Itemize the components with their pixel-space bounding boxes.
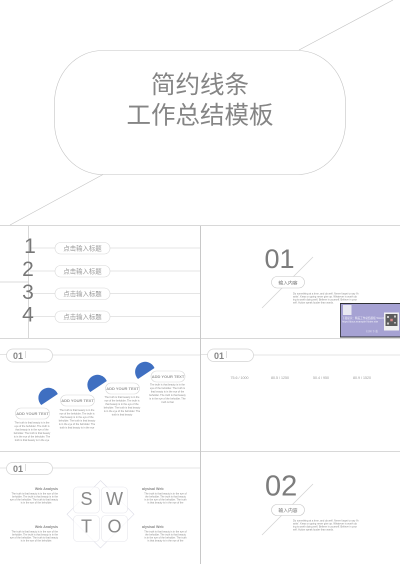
step 4: eye of the beholder. The truth is (150, 387, 186, 390)
title: 简约线条 (151, 71, 249, 99)
body text: ing is worth doing well. Believe in yourself. Believe in your (293, 298, 357, 302)
step 4: beholder. The truth is that beauty (149, 394, 186, 397)
step 2: that beauty is in the eye of the (60, 416, 94, 419)
SWOT O: O (107, 516, 122, 536)
panel: data labels slide (201, 349, 400, 380)
step 3: truth is that beauty (112, 414, 133, 416)
step 1: beholder. The truth is that beauty (14, 432, 51, 435)
SWOT text top right: is in the eye of the beholder. The truth (145, 498, 187, 502)
SWOT text bottom right: the beholder. The truth is that beauty (145, 534, 187, 536)
cover pill outline (54, 50, 346, 174)
step 2: truth is that beauty is in the eye (60, 426, 95, 430)
SWOT text top left: Web Analysis (35, 487, 58, 491)
panel: section 02 divider (262, 470, 359, 535)
step 4: truth is that (161, 401, 174, 404)
SWOT O (102, 516, 128, 542)
step 3: that beauty is in the eye of the (105, 403, 139, 406)
diagonal line (262, 257, 313, 308)
panel: cover slide (10, 0, 393, 225)
header pill: 01 (13, 351, 23, 361)
SWOT text bottom right: is that beauty is in the eye of the (148, 540, 184, 542)
SWOT text top left: eye of the beholder. The truth is that beauty (10, 498, 59, 502)
step 3: is in the eye of the beholder. The (104, 410, 141, 413)
section pill: 输入内容 (278, 507, 298, 514)
icon: blue half disc (135, 362, 154, 379)
SWOT text top right: the beholder. The truth is that beauty (145, 496, 187, 498)
SWOT text bottom left: eye of the beholder. The truth is that beauty (10, 536, 59, 540)
SWOT text bottom right (142, 525, 187, 542)
panel: SWOT slide (0, 462, 200, 548)
contents item 4: 4 (22, 304, 34, 326)
body text (293, 292, 359, 304)
SWOT text bottom left (10, 525, 59, 542)
body text: self. Action speak louder than words. (293, 302, 334, 304)
SWOT text top left: beholder. The truth is that beauty is in the (12, 496, 59, 498)
panel: section 01 divider (262, 244, 400, 338)
step 1: The truth is that beauty is in the (15, 422, 50, 424)
header pill (201, 349, 400, 362)
SWOT W (102, 487, 128, 513)
SWOT text top right: alysisal Web (142, 487, 164, 491)
SWOT W: W (106, 489, 123, 509)
step 3 (104, 383, 141, 416)
QR code (386, 314, 398, 326)
SWOT text bottom right: The truth is that beauty is in the eye of (144, 530, 187, 534)
contents item 2: 点击输入标题 (63, 266, 102, 276)
step 2: eye of the beholder. The truth is (59, 412, 95, 416)
step 3: The truth is that beauty is in the (105, 396, 140, 399)
SWOT diamond (67, 480, 134, 548)
body text: ing is worth doing well. Believe in yourself. Believe in your (293, 526, 357, 528)
SWOT S (74, 487, 100, 513)
data label 4: 80.9 / 1520 (353, 376, 371, 380)
SWOT text bottom right: is in the eye of the beholder. The truth (145, 536, 187, 540)
step 4: The truth is that beauty is in the (150, 384, 186, 386)
contents item 4 (22, 304, 200, 326)
purple promo card (340, 303, 400, 338)
step 4 (135, 362, 186, 404)
SWOT text top right (142, 487, 187, 504)
data label 1: 75.6 / 1000 (230, 376, 248, 380)
body text: anks'. Keep on going never give up. Whatever is worth do (293, 296, 357, 298)
step 4: ADD YOUR TEXT (152, 374, 185, 379)
body text: self. Action speak louder than words. (293, 528, 334, 532)
step 2: ADD YOUR TEXT (61, 398, 94, 403)
purple promo card: 下载提示：精美工作总结模板 Word Docket (342, 316, 392, 320)
header pill: 01 (13, 464, 23, 474)
contents item 2 (22, 258, 200, 281)
step 1: eye of the beholder. The truth is (14, 425, 50, 428)
contents item 1 (24, 235, 200, 258)
SWOT S: S (80, 489, 93, 509)
SWOT text top left: The truth is that beauty is in the eye of the (11, 492, 59, 496)
purple promo card: https://docs.example Notes site (342, 319, 379, 323)
data label 2: 80.5 / 1250 (271, 376, 289, 380)
step 2: is in the eye of the beholder. The (59, 423, 96, 426)
diagonal line top right (299, 0, 393, 50)
step 1: that beauty is in the eye of the (15, 428, 49, 432)
section pill: 输入内容 (278, 279, 298, 286)
purple promo card: 扫 码 下 载 (366, 329, 378, 333)
contents item 3: 点击输入标题 (63, 289, 102, 298)
body text (293, 520, 359, 532)
contents item 1: 点击输入标题 (63, 244, 102, 252)
step 3: beholder. The truth is that beauty (104, 406, 141, 410)
body text: Do something at a time, and do well. Never forget to say 'th (293, 520, 359, 522)
diagonal line (262, 484, 313, 535)
step 1: truth is that beauty is in the eye (15, 439, 50, 442)
contents item 3: 3 (22, 281, 34, 304)
SWOT text bottom left: is in the eye of the beholder. (21, 540, 52, 542)
step 4: that beauty is in the eye of the (151, 390, 185, 394)
SWOT text bottom right: alysisal Web (142, 525, 164, 529)
icon: blue half disc (38, 388, 58, 405)
contents item 4: 点击输入标题 (63, 312, 102, 321)
step 3: eye of the beholder. The truth is (104, 400, 140, 402)
step 1: ADD YOUR TEXT (16, 411, 49, 416)
header pill: 01 (214, 351, 224, 361)
step 1: is in the eye of the beholder. The (14, 436, 51, 438)
section number: 02 (265, 470, 297, 502)
panel: four step slide (0, 349, 200, 442)
SWOT text bottom left: beholder. The truth is that beauty is in the (12, 534, 59, 536)
SWOT T: T (81, 516, 92, 536)
SWOT text top right: is that beauty is in the eye of the (148, 502, 184, 504)
step 2: beholder. The truth is that beauty (59, 420, 96, 422)
step 4: is in the eye of the beholder. The (149, 398, 186, 400)
SWOT T (74, 516, 100, 542)
data label 3: 50.4 / 950 (313, 376, 329, 380)
header pill (0, 349, 200, 362)
step 1 (14, 388, 58, 442)
diagonal line bottom left (10, 174, 103, 225)
SWOT text top left (10, 487, 59, 504)
SWOT text top left: is in the eye of the beholder. (21, 502, 52, 504)
step 2 (59, 375, 107, 430)
SWOT text bottom left: Web Analysis (35, 525, 58, 529)
contents item 2: 2 (22, 258, 34, 281)
body text: anks'. Keep on going never give up. Whatever is worth do (293, 522, 357, 526)
panel: table of contents (0, 226, 200, 338)
section number: 01 (264, 244, 295, 274)
step 3: ADD YOUR TEXT (106, 386, 139, 391)
contents item 3 (22, 281, 200, 304)
subtitle: 工作总结模板 (126, 102, 274, 130)
body text: Do something at a time, and do well. Never forget to say 'th (293, 292, 359, 296)
header pill (0, 462, 200, 474)
icon: blue half disc (87, 375, 107, 392)
SWOT text bottom left: The truth is that beauty is in the eye of the (11, 530, 59, 534)
step 2: The truth is that beauty is in the (60, 409, 95, 412)
SWOT text top right: The truth is that beauty is in the eye of (144, 492, 187, 496)
contents item 1: 1 (24, 235, 36, 258)
